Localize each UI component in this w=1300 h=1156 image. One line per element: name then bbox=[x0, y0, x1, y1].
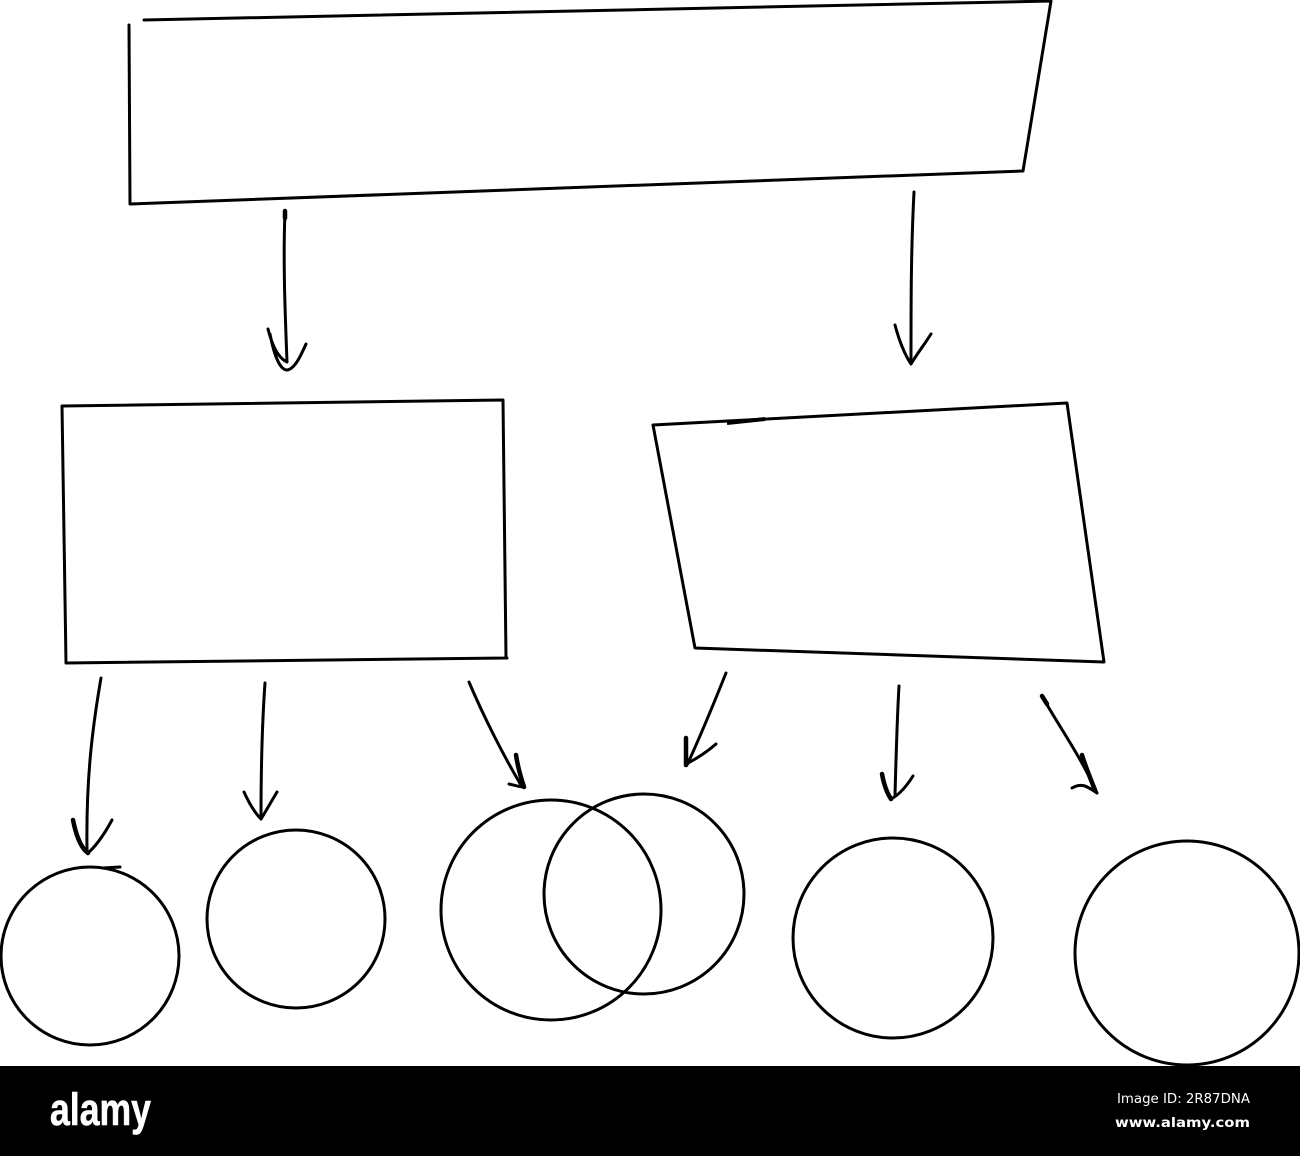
top box bbox=[129, 1, 1051, 204]
left middle box bbox=[62, 400, 507, 663]
arrow: to circle 5 bbox=[882, 686, 913, 799]
arrow: to circle 6 bbox=[1042, 696, 1097, 793]
image id: Image ID: 2R87DNA bbox=[1117, 1092, 1250, 1107]
circle 5 bbox=[793, 838, 993, 1038]
url: www.alamy.com bbox=[1115, 1115, 1250, 1131]
arrow: to left venn circle bbox=[469, 682, 524, 787]
arrow: to circle 1 bbox=[73, 678, 112, 853]
arrow: top box to right box bbox=[895, 192, 931, 364]
venn right circle bbox=[544, 794, 744, 994]
venn left circle bbox=[441, 800, 661, 1020]
footer logo: alamy bbox=[50, 1084, 151, 1135]
circle 6 bbox=[1075, 841, 1299, 1065]
right middle box bbox=[653, 403, 1104, 662]
circle 1 bbox=[1, 867, 179, 1045]
footer bar bbox=[0, 1066, 1300, 1156]
arrow: top box to left box bbox=[268, 211, 306, 370]
circle 2 bbox=[207, 830, 385, 1008]
arrow: to circle 2 bbox=[244, 683, 277, 819]
arrow: to right venn circle bbox=[686, 673, 726, 765]
